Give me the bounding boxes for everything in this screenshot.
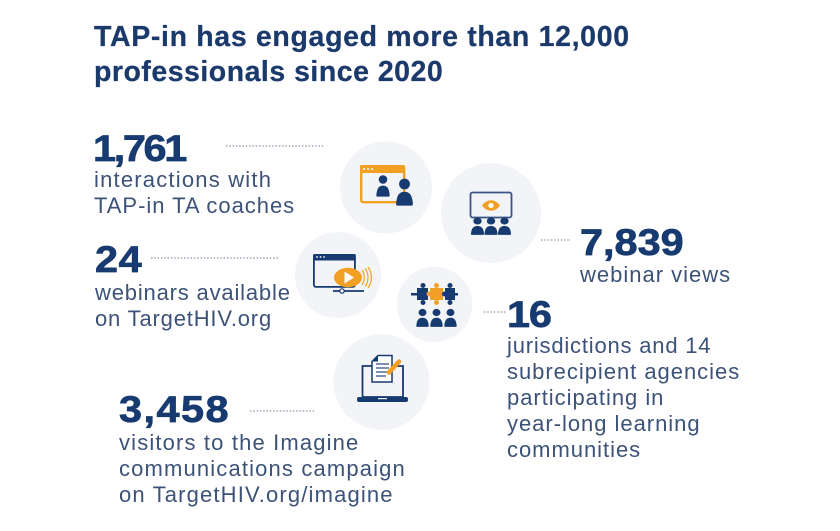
- stat: 16 jurisdictions: 16: [506, 294, 550, 335]
- stat: 7,839 webinar views: 7,839: [580, 222, 684, 263]
- stat: 16 jurisdictions: participating in: [507, 385, 664, 410]
- title: TAP-in has engaged more than 12,000: [94, 21, 630, 53]
- icon: puzzle pieces with people: [397, 267, 472, 342]
- stat: 7,839 webinar views: [580, 222, 731, 287]
- stat: 7,839 webinar views: webinar views: [580, 262, 731, 287]
- title: [94, 21, 630, 88]
- stat: 3,458 visitors: communications campaign: [119, 456, 406, 481]
- stat: 16 jurisdictions: year-long learning: [507, 411, 701, 436]
- stat: 1,761 interactions: TAP-in TA coaches: [94, 193, 295, 218]
- stat: 1,761 interactions: 1,761: [93, 128, 185, 169]
- stat: 16 jurisdictions: subrecipient agencies: [507, 359, 740, 384]
- icon: window with two people: [340, 142, 432, 234]
- stat: 16 jurisdictions: jurisdictions and 14: [507, 333, 711, 358]
- stat: 24 webinars: on TargetHIV.org: [95, 306, 272, 331]
- icon: laptop with document and pencil: [334, 334, 430, 430]
- stat: 1,761 interactions: [93, 128, 295, 218]
- stat: 1,761 interactions: interactions with: [94, 167, 272, 192]
- stat: 3,458 visitors: on TargetHIV.org/imagine: [119, 482, 394, 507]
- stat: 24 webinars: webinars available: [95, 280, 291, 305]
- stat: 16 jurisdictions: communities: [507, 437, 641, 462]
- icon: screen with eye and audience: [441, 163, 541, 263]
- stat: 24 webinars: 24: [95, 239, 142, 280]
- title: professionals since 2020: [94, 56, 443, 88]
- stat: 16 jurisdictions: [506, 294, 740, 462]
- stat: 3,458 visitors: 3,458: [119, 389, 230, 430]
- icon: video player with play button: [295, 232, 381, 318]
- stat: 3,458 visitors: [119, 389, 406, 507]
- stat: 3,458 visitors: visitors to the Imagine: [119, 430, 359, 455]
- stat: 24 webinars: [95, 239, 291, 331]
